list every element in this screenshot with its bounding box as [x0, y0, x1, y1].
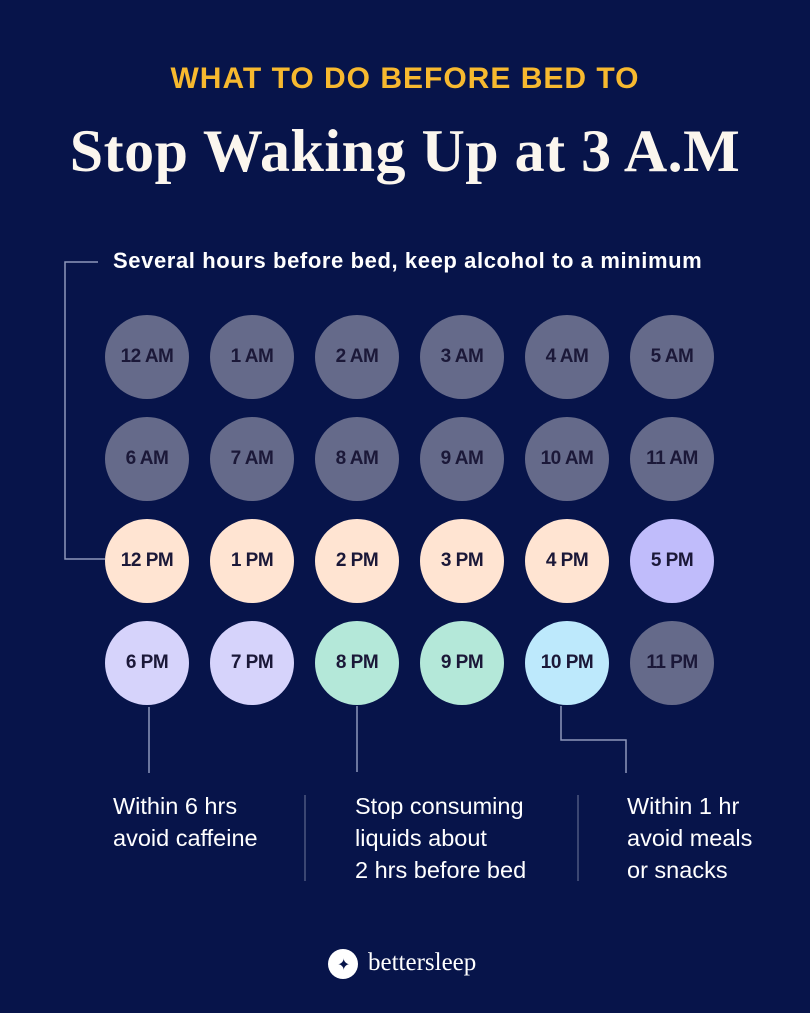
- title eyebrow: WHAT TO DO BEFORE BED TO: [170, 62, 640, 95]
- alcohol note: Several hours before bed, keep alcohol to a minimum: [113, 248, 702, 273]
- tip: liquids: liquids about: [355, 825, 487, 851]
- tip: liquids: [355, 793, 526, 883]
- clock grid: 2 AM: [336, 346, 378, 367]
- clock grid: 5 AM: [651, 346, 693, 367]
- clock grid: 3 AM: [441, 346, 483, 367]
- clock grid: 4 AM: [546, 346, 588, 367]
- clock grid: 10 PM: [541, 652, 593, 673]
- clock grid: 2 PM: [336, 550, 378, 571]
- clock grid: 1 AM: [231, 346, 273, 367]
- clock grid: 1 PM: [231, 550, 273, 571]
- clock grid: 6 AM: [126, 448, 168, 469]
- clock grid: 3 PM: [441, 550, 483, 571]
- tip: caffeine: avoid caffeine: [113, 825, 258, 851]
- clock grid: 7 PM: [231, 652, 273, 673]
- clock grid: 7 AM: [231, 448, 273, 469]
- clock grid: [105, 315, 714, 705]
- clock grid: 12 PM: [121, 550, 173, 571]
- clock grid: 10 AM: [541, 448, 593, 469]
- icon: logo mark: ✦: [337, 957, 350, 974]
- tip: liquids: 2 hrs before bed: [355, 857, 526, 883]
- icon: logo mark: [328, 949, 358, 979]
- tip: liquids: Stop consuming: [355, 793, 524, 819]
- tip: caffeine: [113, 793, 258, 851]
- clock grid: 8 PM: [336, 652, 378, 673]
- tip: meals: avoid meals: [627, 825, 752, 851]
- tip: caffeine: Within 6 hrs: [113, 793, 237, 819]
- clock grid: 12 AM: [121, 346, 173, 367]
- clock grid: 9 AM: [441, 448, 483, 469]
- clock grid: 9 PM: [441, 652, 483, 673]
- clock grid: 5 PM: [651, 550, 693, 571]
- clock grid: 11 AM: [646, 448, 698, 469]
- logo: [328, 949, 476, 979]
- clock grid: 6 PM: [126, 652, 168, 673]
- title: Stop Waking Up at 3 A.M: [70, 118, 740, 184]
- tip: meals: Within 1 hr: [627, 793, 739, 819]
- clock grid: 11 PM: [646, 652, 698, 673]
- clock grid: 8 AM: [336, 448, 378, 469]
- clock grid: 4 PM: [546, 550, 588, 571]
- tip: meals: [627, 793, 752, 883]
- logo: bettersleep: [368, 949, 476, 976]
- tip: meals: or snacks: [627, 857, 728, 883]
